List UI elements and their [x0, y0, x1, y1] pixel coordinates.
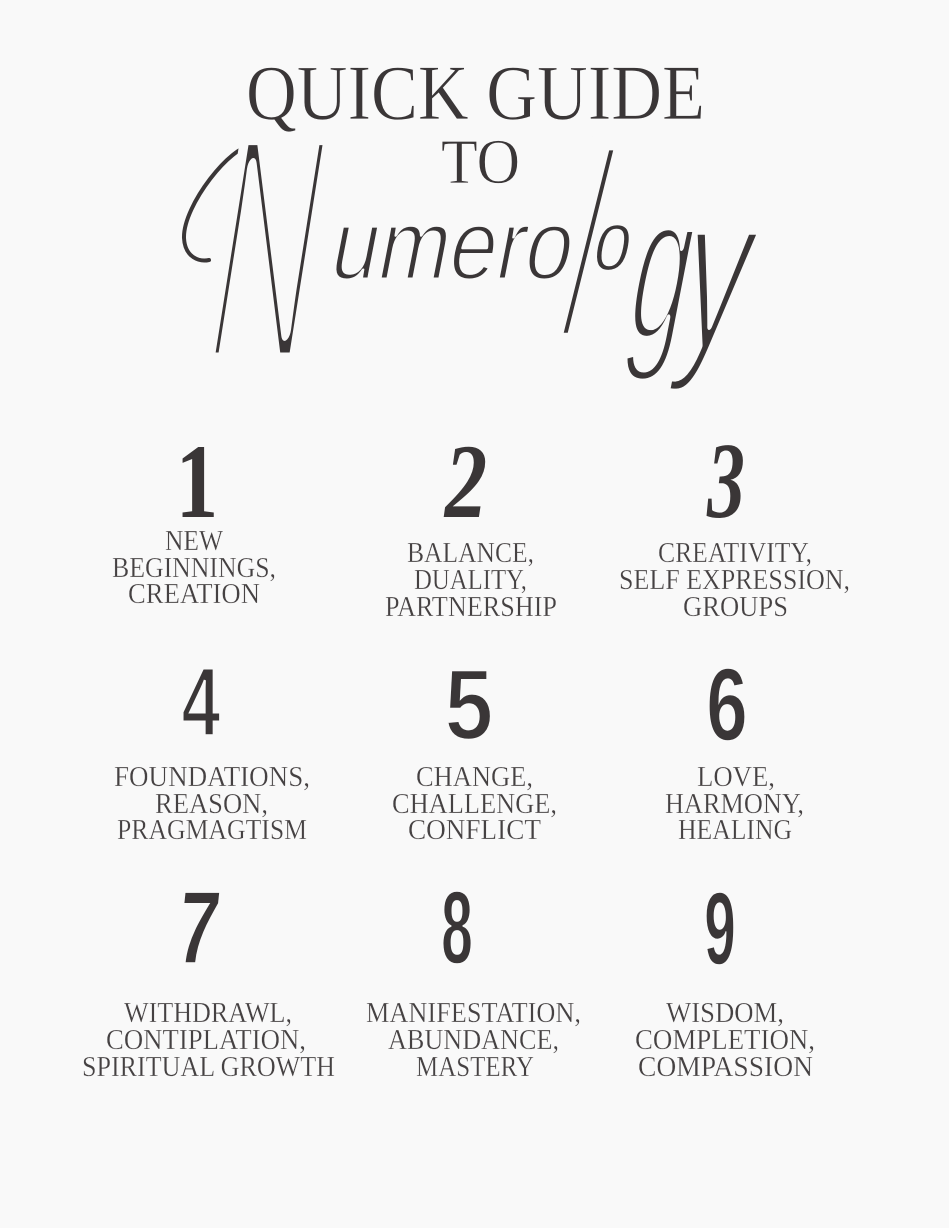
panel: number 3	[619, 422, 850, 623]
numeral 9: 9	[704, 871, 736, 986]
text: change, challenge, conflict	[392, 761, 557, 846]
panel: number 7	[82, 870, 335, 1083]
numeral 1: 1	[176, 422, 218, 540]
panel: number 9	[635, 871, 815, 1083]
numeral 5: 5	[445, 649, 493, 760]
text: wisdom, completion, compassion: WISDOM,	[666, 997, 784, 1029]
panel: number 1	[112, 422, 276, 610]
text: wisdom, completion, compassion: COMPLETION,	[635, 1024, 815, 1056]
title block	[184, 49, 777, 434]
text: love, harmony, healing: HEALING	[678, 814, 792, 846]
text: new beginnings, creation: NEW	[165, 525, 224, 557]
text: manifestation, abundance, mastery: MANIFESTATION,	[366, 997, 581, 1029]
panel: number 8	[366, 870, 581, 1083]
heading: quick guide: QUICK GUIDE	[246, 49, 705, 136]
text: creativity, self expression, groups: CREATIVITY,	[658, 537, 812, 569]
text: wisdom, completion, compassion	[635, 997, 815, 1083]
text: foundations, reason, pragmagtism: REASON,	[155, 788, 268, 820]
text: manifestation, abundance, mastery	[366, 997, 581, 1083]
numeral 7: 7	[172, 870, 225, 986]
text: foundations, reason, pragmagtism	[114, 761, 310, 846]
text: creativity, self expression, groups: SELF EXPRESSION,	[619, 564, 850, 596]
text: withdrawl, contiplation, spiritual growth: WITHDRAWL,	[124, 997, 292, 1029]
text: love, harmony, healing	[665, 761, 804, 846]
text: withdrawl, contiplation, spiritual growth: CONTIPLATION,	[106, 1024, 306, 1056]
text: foundations, reason, pragmagtism: PRAGMAGTISM	[117, 814, 307, 846]
text: foundations, reason, pragmagtism: FOUNDATIONS,	[114, 761, 310, 793]
numeral 2: 2	[443, 422, 487, 540]
heading: to: TO	[441, 126, 520, 197]
script heading: numerology: N	[186, 64, 352, 434]
text: creativity, self expression, groups: GROUPS	[683, 591, 788, 623]
text: love, harmony, healing: LOVE,	[697, 761, 775, 793]
text: balance, duality, partnership: PARTNERSHIP	[385, 591, 557, 623]
text: balance, duality, partnership: DUALITY,	[414, 564, 527, 596]
text: new beginnings, creation: CREATION	[128, 578, 260, 610]
script heading: numerology: l	[517, 91, 657, 403]
text: love, harmony, healing: HARMONY,	[665, 788, 804, 820]
script heading: numerology: umero	[323, 188, 586, 300]
script heading: numerology	[184, 64, 777, 434]
numeral 4: 4	[181, 649, 221, 758]
text: balance, duality, partnership: BALANCE,	[407, 537, 534, 569]
numeral 6: 6	[706, 648, 748, 763]
text: new beginnings, creation: BEGINNINGS,	[112, 552, 276, 584]
text: manifestation, abundance, mastery: ABUNDANCE,	[388, 1024, 559, 1056]
panel: number 5	[392, 649, 557, 846]
text: change, challenge, conflict: CHALLENGE,	[392, 788, 557, 820]
numeral 3: 3	[706, 422, 745, 541]
script heading: numerology: g	[613, 148, 717, 384]
text: new beginnings, creation	[112, 525, 276, 610]
text: change, challenge, conflict: CONFLICT	[408, 814, 541, 846]
text: withdrawl, contiplation, spiritual growth: SPIRITUAL GROWTH	[82, 1051, 335, 1083]
numeral 8: 8	[441, 870, 473, 985]
script heading: numerology: y	[663, 148, 777, 394]
panel: number 4	[114, 649, 310, 846]
text: wisdom, completion, compassion: COMPASSION	[638, 1051, 813, 1083]
panel: number 2	[385, 422, 557, 623]
text: withdrawl, contiplation, spiritual growth	[82, 997, 335, 1083]
script heading: numerology: o	[586, 194, 642, 289]
text: balance, duality, partnership	[385, 537, 557, 623]
text: creativity, self expression, groups	[619, 537, 850, 623]
panel: number 6	[665, 648, 804, 846]
text: manifestation, abundance, mastery: MASTERY	[416, 1051, 534, 1083]
text: change, challenge, conflict: CHANGE,	[416, 761, 533, 793]
